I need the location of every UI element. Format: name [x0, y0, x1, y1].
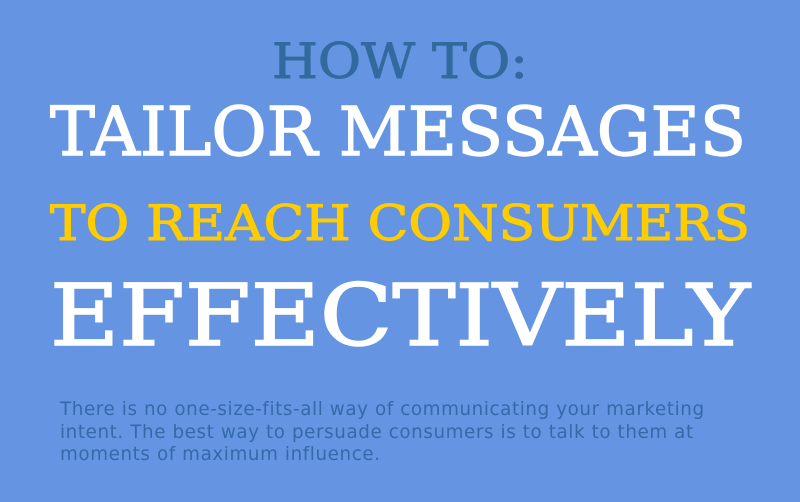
intro paragraph: There is no one-size-fits-all way of communicating your marketing intent. The best way to persuade consumers is to talk to them at moments of maximum influence.	[60, 399, 705, 465]
title	[50, 33, 752, 366]
heading: to reach consumers: TO REACH CONSUMERS	[50, 195, 750, 252]
heading: tailor messages: TAILOR MESSAGES	[50, 93, 746, 171]
heading: how to: HOW TO:	[272, 33, 528, 90]
heading: effectively: EFFECTIVELY	[50, 267, 751, 366]
